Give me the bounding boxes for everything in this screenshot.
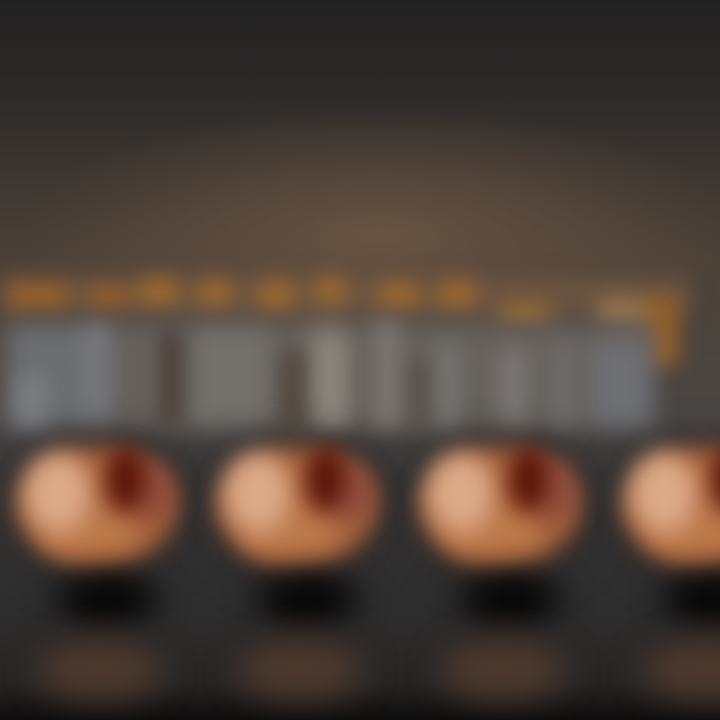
background glow	[20, 105, 720, 365]
nut and base: column 3	[409, 441, 593, 700]
blurred orange headline	[0, 276, 690, 366]
nut and base: column 4	[612, 441, 720, 700]
nut and base: column 2	[206, 441, 390, 700]
blurred grey lettering	[4, 322, 654, 428]
letter highlights and gaps	[18, 320, 574, 426]
nut and base: column 1	[6, 441, 190, 700]
